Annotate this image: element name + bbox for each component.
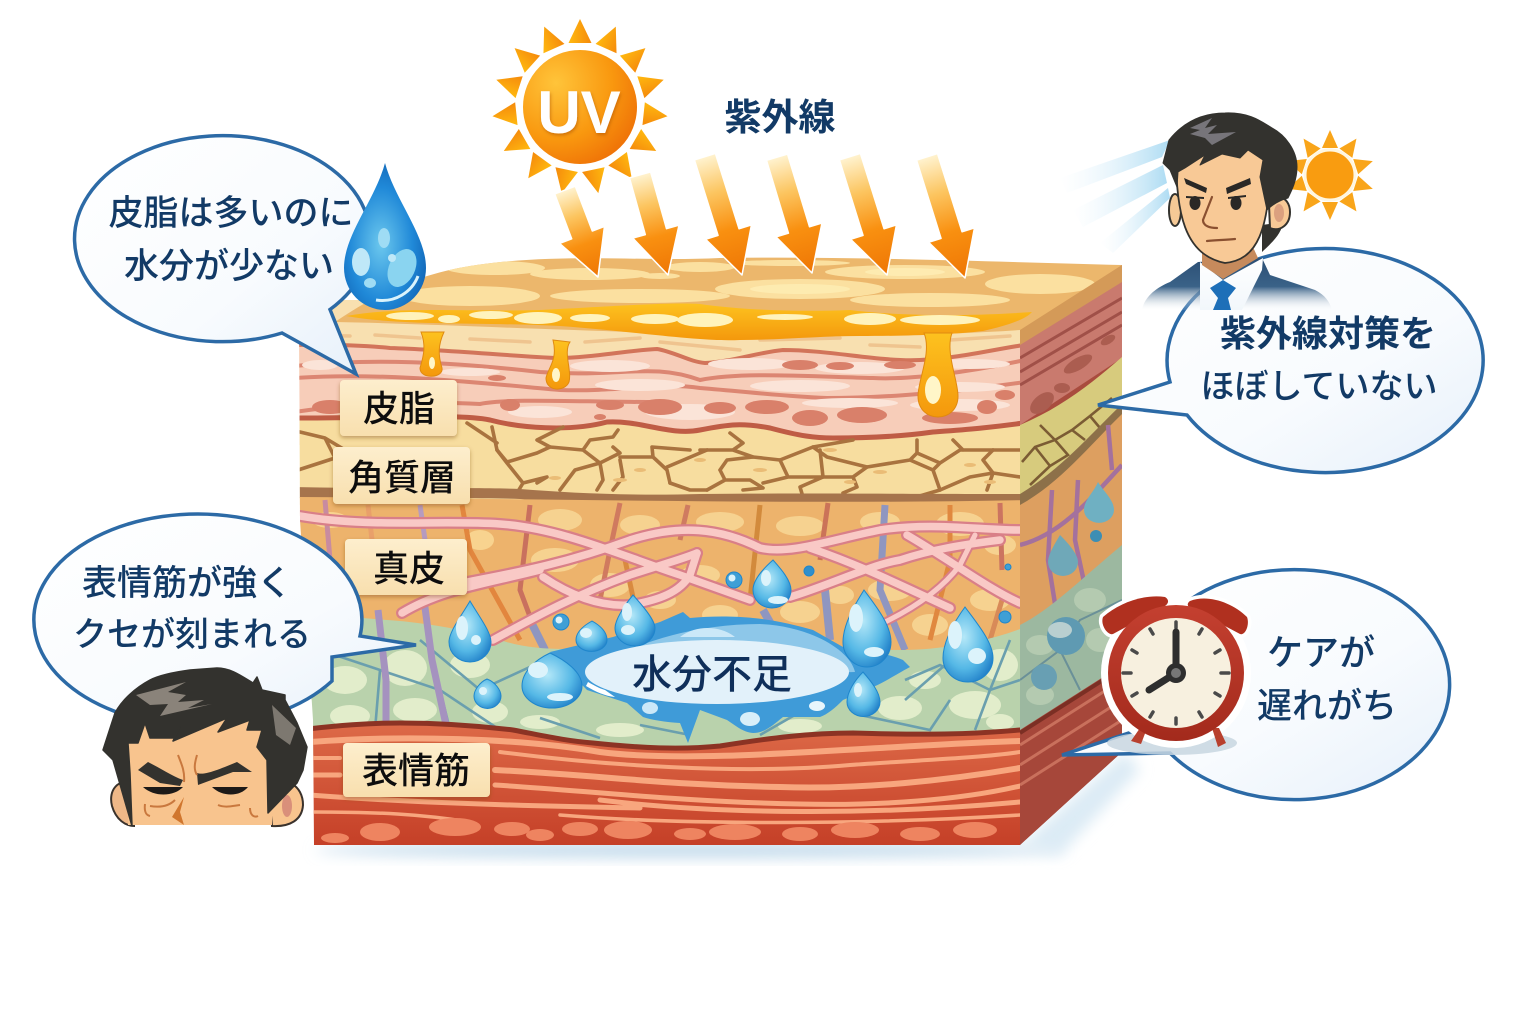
- callout: high sebum, low moisture: 水分が少ない: [124, 247, 334, 286]
- callout: delayed care: ケアが: [1267, 632, 1375, 673]
- character: man in the sun: [1060, 113, 1375, 310]
- cream upper band: [290, 300, 1030, 375]
- label: sebum: [340, 380, 457, 436]
- hair: [103, 668, 307, 826]
- callout: high sebum, low moisture: [75, 136, 371, 374]
- water drops in the dermis: [449, 560, 1011, 716]
- shirt: [1200, 258, 1263, 310]
- heading: ultraviolet: 紫外線: [724, 97, 836, 138]
- pink epidermis layer: [290, 344, 1030, 445]
- label: stratum corneum: 角質層: [348, 457, 456, 498]
- UV lettering: UV: [537, 79, 621, 146]
- ground shadow: [315, 752, 1140, 858]
- closed eyes: [143, 787, 183, 795]
- small sun: [1285, 130, 1375, 220]
- wrinkles and nose: [172, 797, 184, 825]
- front face of the block: [290, 300, 1030, 850]
- suit: [1142, 258, 1332, 310]
- callout: expression muscles: 表情筋が強く: [82, 564, 292, 603]
- red facial muscle layer: [290, 723, 1030, 850]
- UV sun: [491, 19, 669, 195]
- neck: [1202, 245, 1258, 279]
- callout: high sebum, low moisture: 皮脂は多いのに: [108, 194, 354, 233]
- green lower dermis layer: [290, 600, 1030, 755]
- label: dermis: 真皮: [373, 548, 445, 589]
- label: sebum: 皮脂: [363, 388, 435, 429]
- pink collagen fibres: [300, 516, 1020, 640]
- brows: [1184, 178, 1251, 194]
- icon: alarm clock: [1101, 596, 1251, 755]
- hair: [1163, 113, 1297, 210]
- UV arrows: [543, 149, 988, 286]
- callout: delayed care: 遅れがち: [1257, 687, 1397, 726]
- sun glare beams: [1060, 140, 1170, 253]
- ears: [111, 782, 134, 826]
- skin cross-section block: [290, 250, 1130, 860]
- right side face of the block: [1020, 265, 1122, 845]
- tie: [1210, 280, 1236, 310]
- label: water shortage: 水分不足: [632, 653, 792, 697]
- hair back and neck: [1262, 222, 1283, 252]
- label: dermis: [345, 539, 467, 595]
- callout: expression muscles: [34, 514, 416, 726]
- nose and mouth: [1203, 197, 1235, 241]
- top surface of the block: [336, 258, 1122, 334]
- water shortage puddle: [550, 612, 910, 743]
- right ear: [1269, 197, 1290, 229]
- sebum drips: [420, 332, 958, 417]
- character: frowning man: [103, 668, 307, 826]
- label: facial muscle: 表情筋: [362, 750, 470, 791]
- face: [1176, 145, 1270, 263]
- callout: delayed care: [1062, 570, 1450, 800]
- sun rays: [491, 19, 669, 195]
- callout: expression muscles: クセが刻まれる: [73, 616, 311, 654]
- label: facial muscle: [343, 743, 490, 797]
- callout: sunscreen skipped: ほぼしていない: [1201, 368, 1437, 406]
- cracked stratum layer: [290, 417, 1030, 507]
- face: [128, 715, 272, 825]
- yellow sebum band: [346, 303, 1032, 340]
- left ear: [1169, 194, 1181, 226]
- label: stratum corneum: [333, 447, 470, 504]
- orange dermis layer: [290, 497, 1030, 700]
- callout: sunscreen skipped: 紫外線対策を: [1220, 313, 1436, 354]
- brows: [138, 762, 183, 786]
- eyes: [1186, 195, 1246, 210]
- icon: water drop: [344, 163, 426, 310]
- callout: sunscreen skipped: [1098, 249, 1483, 473]
